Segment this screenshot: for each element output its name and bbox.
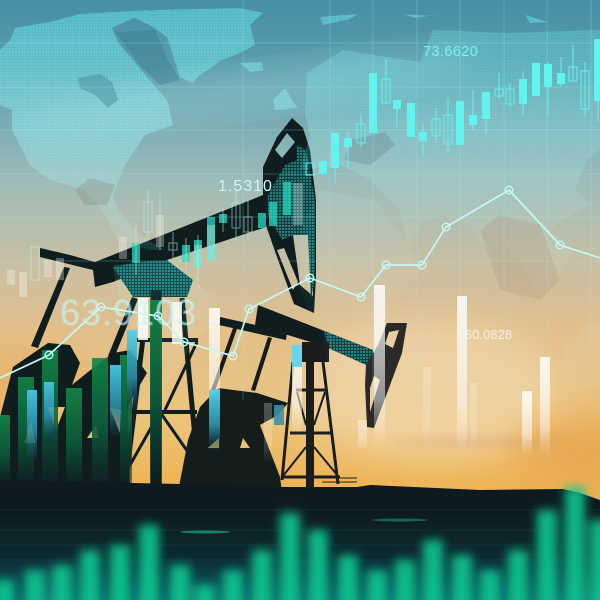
hollow candles and wicks [31, 190, 252, 280]
value label: 1.5310: 1.5310 [218, 178, 273, 195]
large pump hub [113, 260, 193, 297]
South America [113, 262, 216, 357]
large pump tower lattice [127, 290, 198, 490]
Hudson Bay [78, 74, 118, 108]
white bar chart [138, 285, 550, 463]
small pump tower lattice [282, 342, 340, 490]
sky gaps in counterweights [24, 407, 122, 443]
value label: 60.0828: 60.0828 [465, 328, 512, 342]
value label: 63.9103: 63.9103 [60, 292, 197, 333]
oil pump silhouettes [0, 118, 407, 492]
small pump pitman arms [211, 328, 272, 391]
large pump pitman arms [31, 267, 138, 358]
Greenland [125, 8, 263, 83]
small pump walking beam [219, 305, 373, 368]
large pump counterweight body [0, 343, 147, 490]
Africa [300, 190, 334, 330]
line chart with markers [0, 186, 600, 378]
large pump walking beam [40, 195, 266, 287]
Iceland [240, 62, 263, 72]
Mediterranean [345, 132, 395, 165]
chart grid lines [0, 0, 600, 400]
small pump beam teal overlay [324, 331, 373, 368]
pale bars [209, 308, 220, 438]
green and blue bar chart lower left [0, 300, 302, 488]
large pump horse head teal overlay [268, 145, 315, 300]
small pump horse head [365, 323, 407, 428]
blurred green bar chart along bottom [0, 487, 600, 600]
Australia [580, 322, 599, 330]
green bars [0, 415, 10, 485]
dark seas on the map [75, 30, 560, 300]
blue bars [27, 390, 37, 460]
candle wicks [335, 45, 598, 183]
large pump horse head [263, 118, 316, 313]
cyan filled candles [132, 182, 291, 268]
candlestick chart center left [7, 182, 303, 297]
Indian Ocean tint [480, 215, 560, 300]
hollow candles [306, 67, 589, 175]
Arctic islands [320, 14, 548, 25]
pale candles [7, 183, 303, 297]
North America [0, 10, 173, 250]
Gulf of Mexico [75, 178, 115, 205]
candlestick chart upper right [306, 39, 600, 183]
ground and reflective floor [0, 478, 600, 600]
small pump sky gaps [208, 438, 250, 448]
small pump counterweight [178, 388, 288, 492]
British Isles [273, 88, 298, 110]
dotted world map [0, 8, 600, 357]
Eurasia [300, 30, 600, 228]
value label: 73.6620: 73.6620 [423, 44, 478, 60]
Baffin Bay [115, 30, 180, 85]
filled candles [319, 39, 600, 174]
